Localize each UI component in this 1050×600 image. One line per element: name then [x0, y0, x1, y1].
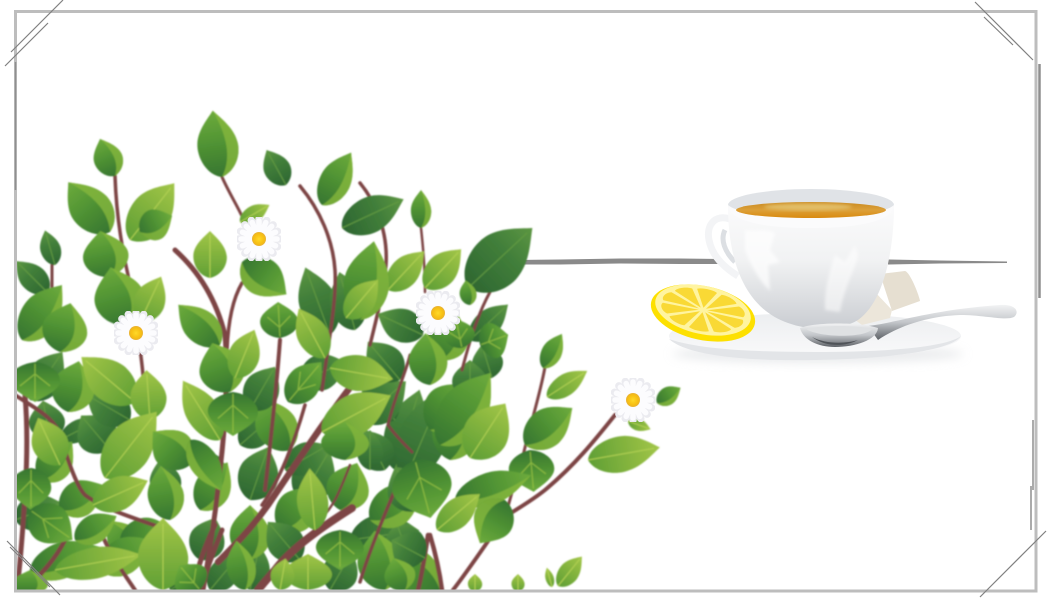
daisy flower 1	[116, 313, 156, 353]
teacup	[708, 189, 894, 329]
plant: flowering tea bush	[7, 108, 685, 600]
corner lines: top left	[5, 0, 63, 66]
tea set	[646, 189, 1017, 363]
daisy flower 2	[239, 219, 279, 259]
corner lines: bottom right	[980, 531, 1046, 597]
lemon slice	[646, 276, 760, 350]
cup handle	[708, 218, 738, 276]
cup highlights	[745, 230, 780, 292]
back leaf layer	[9, 261, 517, 600]
stems	[15, 176, 615, 590]
front leaf layer: bottom	[17, 461, 583, 590]
horizon line: left segment	[513, 258, 722, 264]
tea surface	[736, 202, 886, 218]
front leaf layer: middle	[10, 329, 685, 557]
daisy flower 3	[418, 293, 458, 333]
corner lines: top right	[975, 2, 1033, 60]
saucer	[669, 313, 964, 363]
corner lines: bottom left	[7, 541, 60, 595]
sugar cubes	[854, 271, 920, 325]
front leaf layer: upper crown	[7, 108, 550, 400]
daisy flower 4	[613, 380, 653, 420]
horizon line: right segment	[888, 260, 1007, 264]
frame side scratches	[16, 62, 1040, 530]
teaspoon	[800, 305, 1017, 347]
